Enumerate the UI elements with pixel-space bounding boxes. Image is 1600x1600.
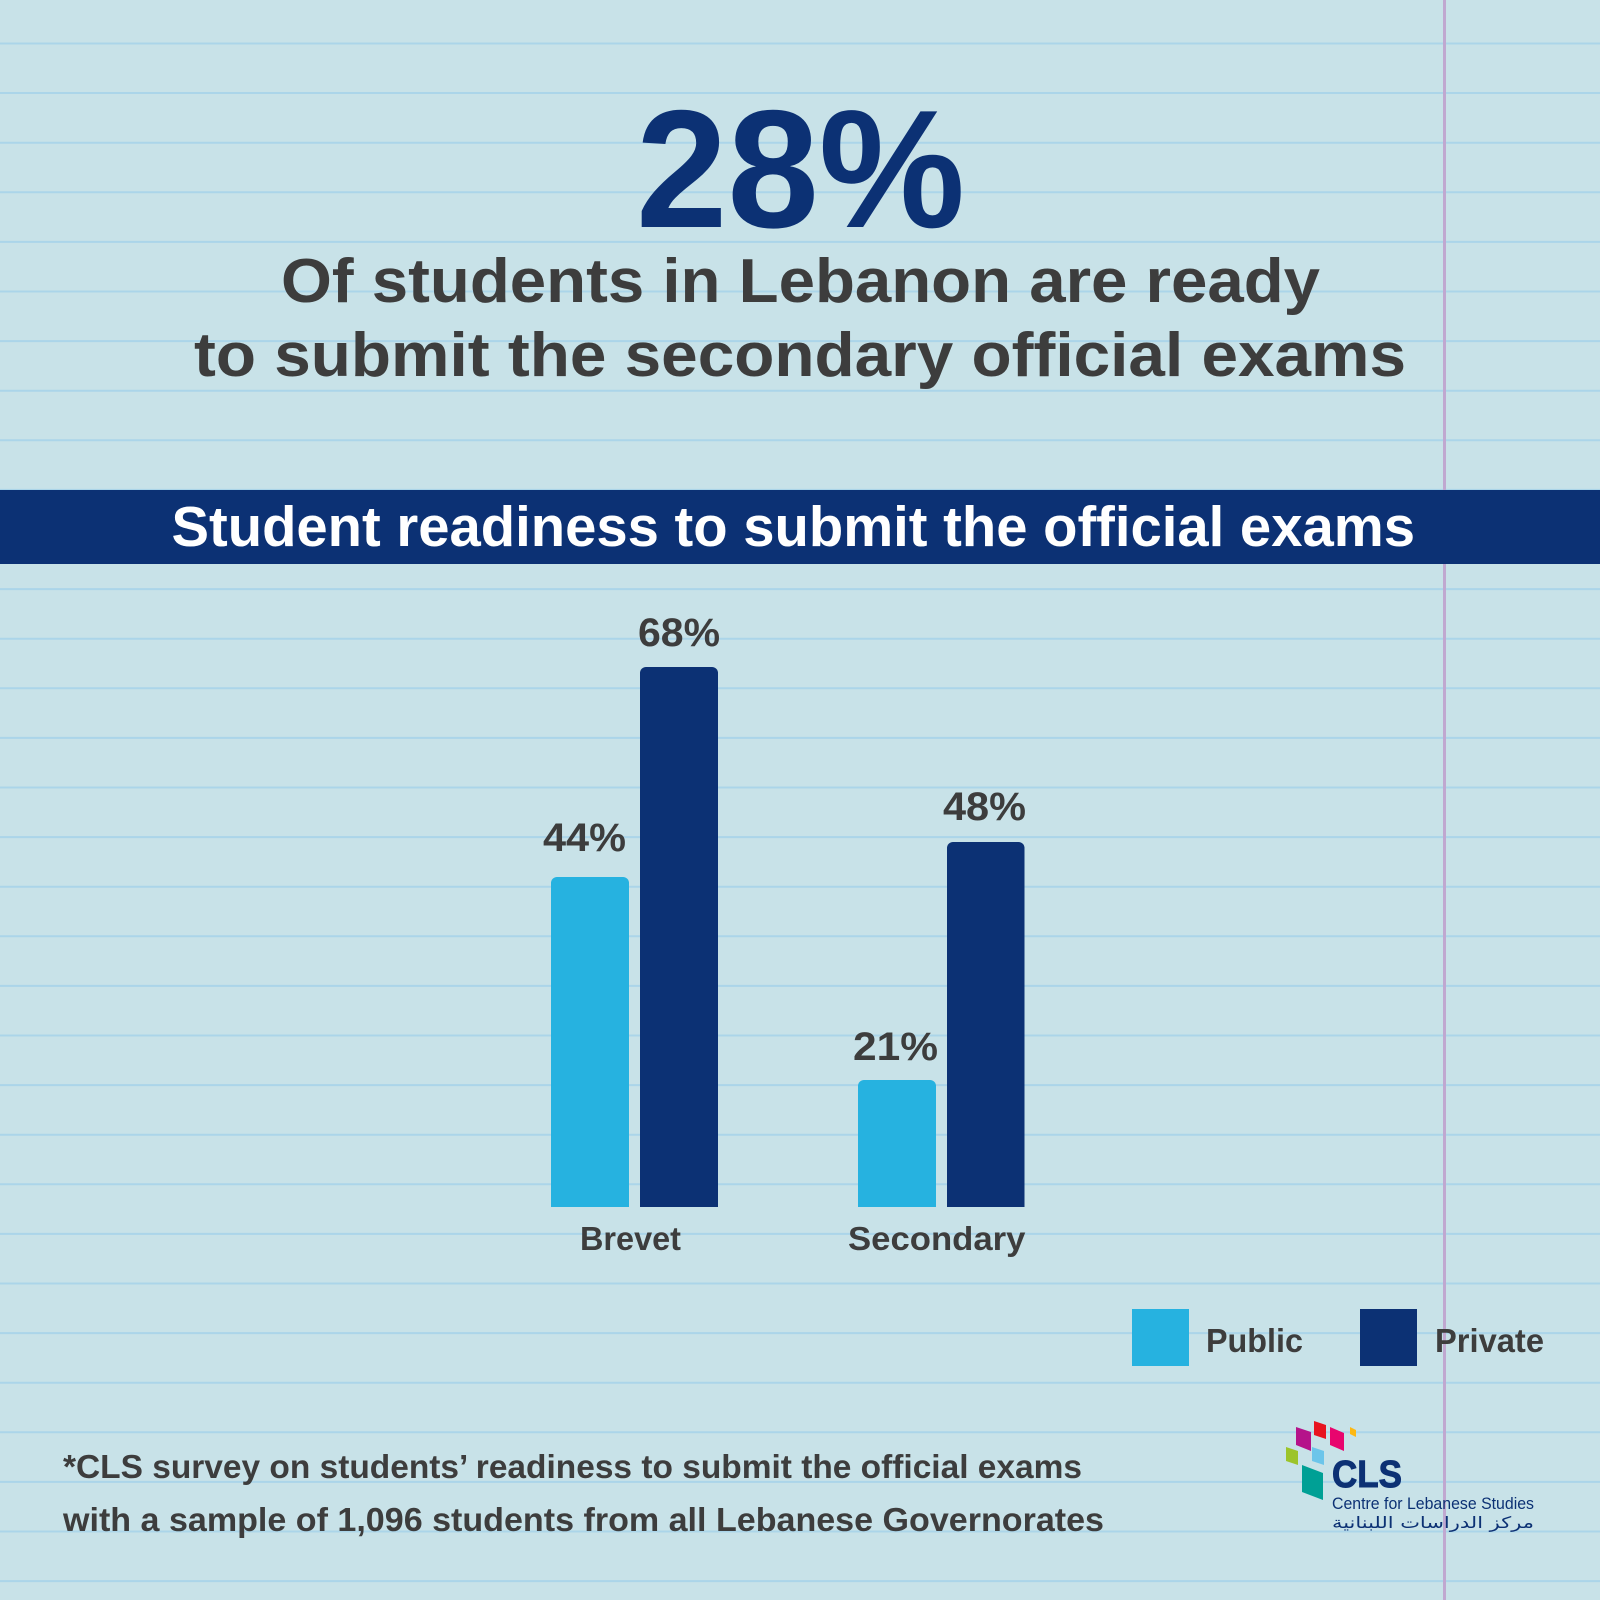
bar group: Brevet: Brevet — [580, 1220, 681, 1257]
bar group: Brevet: 68% — [638, 611, 720, 655]
bar group: Secondary: 48% — [943, 785, 1026, 829]
footnote: with a sample of 1,096 students from all Lebanese Governorates — [62, 1501, 1104, 1538]
subheading text — [194, 247, 1406, 390]
legend — [1132, 1309, 1544, 1366]
footnote: *CLS survey on students’ readiness to submit the official exams — [63, 1448, 1082, 1485]
logo: Centre for Lebanese Studies: CLS — [1332, 1454, 1402, 1496]
legend: Public — [1206, 1322, 1303, 1359]
bar group: Secondary: Secondary — [848, 1220, 1026, 1257]
section banner — [0, 490, 1600, 564]
bar group: Brevet — [543, 611, 720, 1257]
logo mark: coloured tiles — [1286, 1421, 1356, 1500]
logo: Centre for Lebanese Studies: Centre for Lebanese Studies — [1332, 1495, 1534, 1513]
logo: Centre for Lebanese Studies: مركز الدراسات اللبنانية — [1332, 1513, 1534, 1533]
bar chart — [543, 611, 1026, 1257]
bar group: Brevet: 44% — [543, 816, 626, 860]
bar group: Secondary — [848, 785, 1026, 1257]
section banner: Student readiness to submit the official exams — [172, 495, 1415, 559]
footnote — [62, 1448, 1104, 1538]
headline statistic: 28%: 28% — [636, 75, 965, 263]
bar group: Secondary: 21% — [853, 1025, 938, 1069]
legend: Private — [1435, 1322, 1544, 1359]
subheading text: Of students in Lebanon are ready — [281, 247, 1321, 316]
logo: Centre for Lebanese Studies — [1286, 1421, 1534, 1533]
subheading text: to submit the secondary official exams — [194, 321, 1406, 390]
